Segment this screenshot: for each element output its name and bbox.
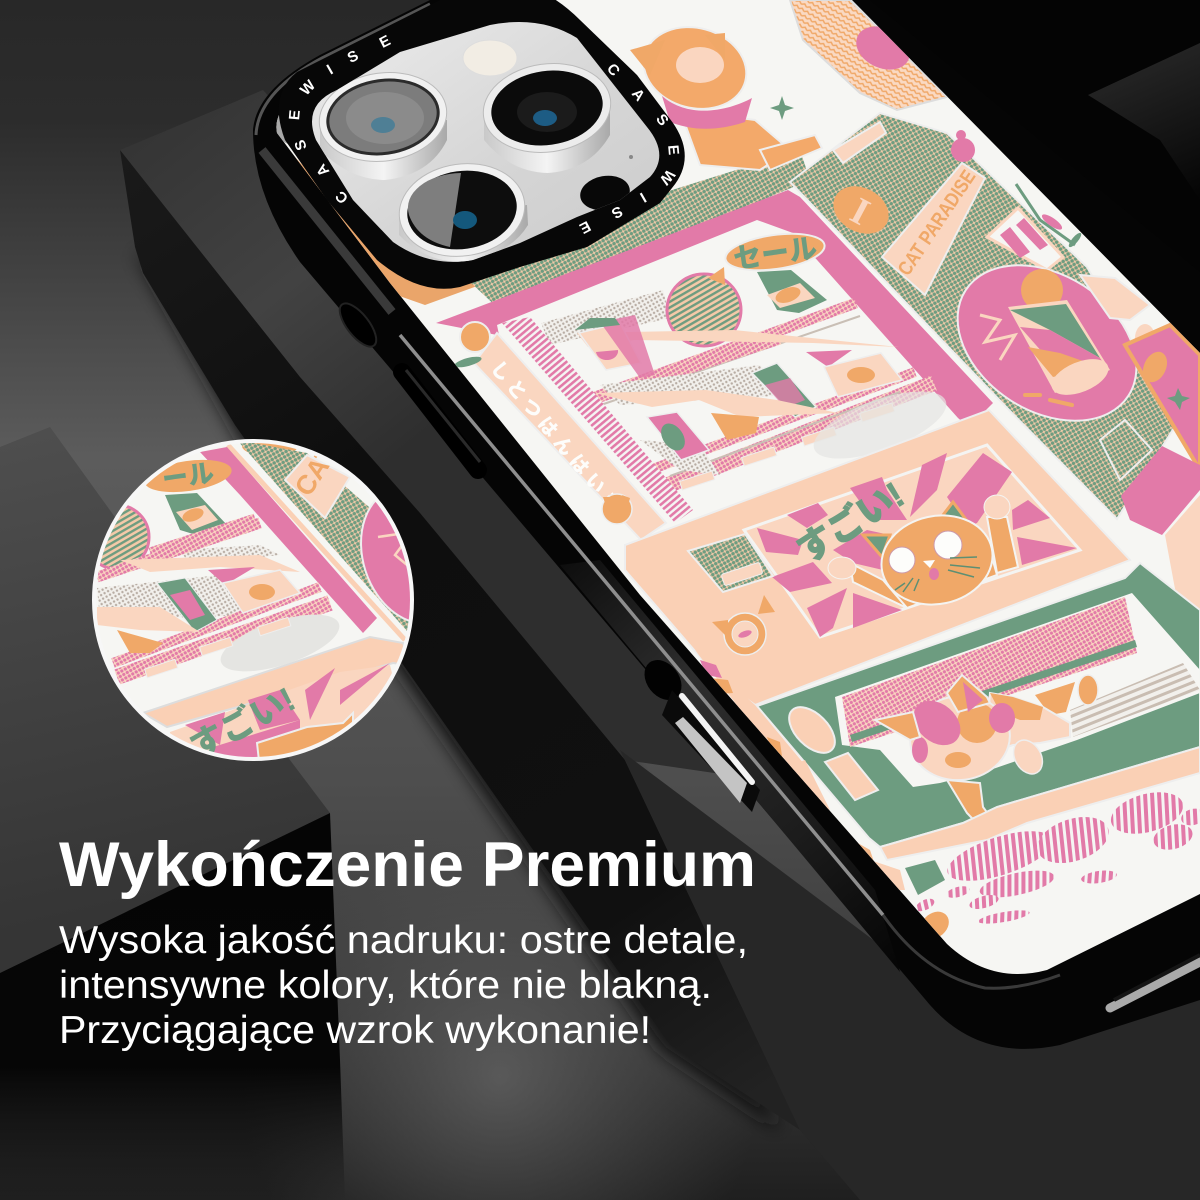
dark lens — [402, 164, 522, 256]
round cat badge — [712, 595, 775, 655]
wavy bag — [790, 0, 947, 110]
eyes — [889, 547, 915, 573]
orange letter badge: I — [844, 190, 876, 234]
bottom speaker cutout — [1110, 962, 1200, 1008]
top orange oval — [242, 436, 298, 456]
sale oval — [142, 455, 234, 497]
peach cat corner right — [1165, 495, 1200, 608]
casewise lettering left: A — [313, 160, 333, 180]
orange glass — [117, 630, 163, 653]
back body — [1035, 682, 1075, 715]
barrel — [320, 120, 447, 180]
casewise lettering left: S — [345, 47, 361, 67]
ring — [477, 56, 617, 160]
capsule sign — [781, 699, 878, 800]
paw — [1008, 735, 1048, 779]
exclamation text: すごい! — [789, 474, 911, 571]
barrel — [484, 105, 610, 173]
inner glass — [346, 92, 424, 144]
wedge right of band — [620, 750, 1200, 1200]
sale oval: セール — [731, 232, 819, 275]
striped card — [987, 208, 1063, 270]
green halftone panel — [790, 113, 1177, 519]
camera ring — [279, 0, 685, 289]
striped racket — [667, 267, 741, 346]
front rim near camera — [262, 150, 392, 312]
lower left block top face — [0, 427, 330, 973]
sunburst panel — [744, 445, 1080, 637]
rays — [757, 453, 1077, 637]
sunburst rays — [185, 663, 390, 770]
lenses clipped to window — [313, 40, 633, 264]
gray halftone mid — [600, 365, 790, 405]
casewise lettering left: C — [332, 187, 352, 207]
burst mark — [378, 532, 413, 570]
green soda can upper — [752, 363, 816, 417]
whiskers — [895, 557, 980, 592]
casewise lettering left: I — [324, 62, 336, 78]
peach tags — [145, 617, 291, 678]
orange art under camera — [294, 156, 476, 305]
green panel — [757, 563, 1200, 847]
bottle: orange band — [1028, 347, 1082, 377]
pink patch 2 — [989, 703, 1015, 733]
calico cat — [875, 675, 1098, 842]
lower left block front face — [0, 813, 345, 1200]
rim lower curve — [883, 915, 1060, 988]
cat head — [257, 713, 353, 770]
barrel — [399, 205, 528, 262]
casewise lettering right: E — [664, 144, 682, 156]
blue glint — [533, 110, 557, 126]
casewise lettering right: A — [628, 85, 648, 105]
top side button hole — [333, 298, 383, 352]
small green halftone card — [688, 534, 773, 592]
orange edge pieces — [695, 650, 954, 944]
cat right arm — [987, 517, 1018, 573]
orange flower — [460, 322, 490, 352]
shelf interior — [497, 220, 960, 421]
lidar — [577, 172, 633, 214]
back foot — [1078, 675, 1098, 705]
line 3: Przyciągające wzrok wykonanie! — [59, 1009, 651, 1052]
bottle: pink band — [1020, 327, 1102, 360]
button hole — [637, 653, 689, 707]
printed cat artwork on phone — [276, 0, 1200, 974]
upper block top face — [120, 90, 900, 800]
orange glass — [711, 413, 759, 440]
cat head — [873, 505, 1001, 615]
cat paradise banner: CAT PARADISE — [894, 166, 980, 280]
side surface strip — [560, 560, 900, 972]
top orange cat — [630, 16, 822, 170]
chrome volume button — [637, 653, 760, 812]
casewise lettering left: W — [297, 76, 320, 99]
button recess — [662, 690, 760, 812]
ear pink — [963, 682, 983, 712]
pink halftone shelf strips — [592, 303, 934, 487]
casewise lettering right — [577, 60, 682, 237]
can — [157, 578, 217, 632]
pink bar — [200, 447, 377, 633]
bottle — [165, 493, 227, 537]
juice carton — [575, 315, 655, 378]
icon: cherries — [951, 130, 975, 162]
exclamation text: すごい! — [183, 679, 302, 767]
new badge — [1143, 352, 1167, 382]
dark edge — [321, 71, 445, 163]
line 2: intensywne kolory, które nie blakną. — [59, 964, 712, 1007]
camera bump — [279, 0, 685, 289]
magnifier base — [90, 438, 420, 768]
pink blocks right — [1121, 446, 1200, 535]
rim highlight — [400, 335, 883, 915]
green halftone — [237, 440, 415, 640]
shelf strips — [97, 518, 330, 677]
orange patch — [957, 703, 997, 743]
gray halftones — [97, 575, 260, 620]
nose and tongue — [923, 560, 939, 580]
casewise lettering right: C — [603, 60, 623, 80]
lens 2 — [477, 56, 617, 173]
pink oval with bottle — [956, 264, 1138, 422]
casewise lettering right: W — [655, 166, 678, 189]
pink stripes band — [502, 317, 693, 523]
side button gloss — [406, 370, 480, 462]
ear — [947, 675, 990, 712]
right ear — [943, 502, 970, 525]
ring — [313, 65, 453, 169]
grey reflection half — [408, 173, 461, 247]
ring — [393, 156, 531, 264]
shadow blob — [214, 603, 346, 683]
blue glint — [453, 211, 477, 229]
green star — [1167, 388, 1190, 410]
peach labels — [680, 403, 895, 490]
inner — [517, 92, 577, 132]
small cat face icon — [602, 494, 632, 524]
bottle: green band — [1010, 304, 1100, 358]
small sign — [833, 122, 886, 163]
orange slice — [1021, 269, 1063, 305]
white highlight — [682, 696, 752, 782]
hand lower — [97, 607, 200, 632]
body orange — [990, 693, 1043, 720]
big peach bar — [143, 637, 410, 727]
face peach — [676, 47, 724, 83]
white base — [276, 0, 1200, 974]
glass — [325, 75, 441, 159]
cat banner: CAT — [289, 440, 343, 501]
soft shadow — [806, 378, 954, 472]
peach vertical sign: しとつはんはいき — [486, 357, 625, 517]
upper block side face — [120, 150, 800, 1130]
pink card — [208, 567, 255, 585]
striped racket — [85, 505, 149, 569]
cat left arm — [850, 563, 907, 608]
icon: sparkle — [770, 96, 794, 120]
pack with orange oval — [806, 350, 902, 397]
bottle: peach base — [1052, 359, 1108, 395]
blue glint — [371, 117, 395, 133]
ear left — [875, 712, 920, 740]
cat paradise banner — [882, 163, 985, 295]
green halftone strip top — [471, 157, 806, 302]
black back area top right — [840, 0, 1200, 320]
lower hand — [595, 390, 838, 417]
bottle: peach body — [1008, 300, 1110, 393]
bright floor spot — [240, 817, 760, 1200]
case corner gloss — [256, 4, 430, 135]
head — [905, 689, 1015, 787]
microphone — [629, 155, 633, 159]
casewise lettering left: E — [286, 109, 304, 121]
lower orange — [945, 752, 971, 768]
casewise lettering left — [286, 32, 393, 207]
pink circle on bag — [856, 26, 909, 70]
upper hand — [577, 330, 899, 347]
gray hatching — [1070, 663, 1200, 737]
leg — [947, 780, 1000, 840]
burst lines — [980, 315, 1015, 360]
casewise lettering right: E — [577, 217, 593, 237]
casewise lettering left: S — [291, 137, 311, 153]
right block — [1088, 43, 1200, 200]
side action button — [402, 372, 478, 470]
body — [985, 693, 1070, 755]
title: Wykończenie Premium — [59, 830, 756, 900]
white ring — [94, 441, 412, 759]
orange marks — [1025, 395, 1072, 405]
casewise lettering right: S — [609, 202, 625, 222]
casewise lettering left: E — [377, 32, 393, 52]
gray halftone band — [541, 290, 670, 345]
white window — [835, 593, 1200, 787]
tail — [760, 135, 822, 170]
pink shelf frame — [436, 190, 993, 430]
casewise lettering right: S — [652, 111, 672, 129]
line 1: Wysoka jakość nadruku: ostre detale, — [59, 919, 748, 962]
sign leaves — [453, 355, 573, 520]
clear gloss corner — [276, 115, 288, 144]
hand upper — [120, 555, 300, 572]
peach frame — [625, 410, 1130, 705]
soft shadow under upper block — [135, 250, 780, 1130]
peach vertical sign — [474, 333, 666, 540]
body — [687, 120, 781, 171]
lens 3 — [393, 156, 531, 264]
lens — [486, 64, 608, 152]
leaf sprig — [1016, 184, 1083, 249]
soda can lower — [647, 412, 709, 460]
pink hatched cobblestones — [914, 785, 1200, 926]
magnifier circle — [85, 436, 486, 770]
cat paws — [984, 495, 1010, 519]
small cat at right edge — [1078, 274, 1154, 338]
pink oval — [344, 472, 486, 638]
silver plate — [675, 717, 747, 803]
bottle on shelf — [757, 270, 827, 313]
green stripe — [850, 640, 1137, 742]
flash — [463, 40, 517, 76]
description — [59, 919, 748, 1052]
new panel — [1125, 325, 1200, 470]
sunburst base — [170, 665, 415, 770]
left side patch — [912, 737, 928, 763]
lens 1 — [313, 65, 453, 180]
sale oval: ール — [160, 458, 216, 494]
peach rail — [228, 445, 405, 640]
leg paw — [973, 810, 1003, 842]
pink halftone awning — [842, 597, 1137, 747]
lens glass window — [312, 22, 659, 262]
peach strip — [880, 747, 1200, 860]
cat body — [883, 550, 997, 608]
orange letter badge — [833, 186, 889, 234]
phone case body — [253, 0, 1200, 1049]
cat banner — [285, 440, 350, 518]
casewise lettering right: I — [637, 189, 649, 205]
halftone window frame — [1100, 420, 1152, 480]
pink patch — [905, 692, 969, 754]
ear — [630, 44, 652, 70]
scarf — [662, 96, 752, 129]
pack — [223, 570, 300, 613]
left ear — [863, 535, 890, 557]
